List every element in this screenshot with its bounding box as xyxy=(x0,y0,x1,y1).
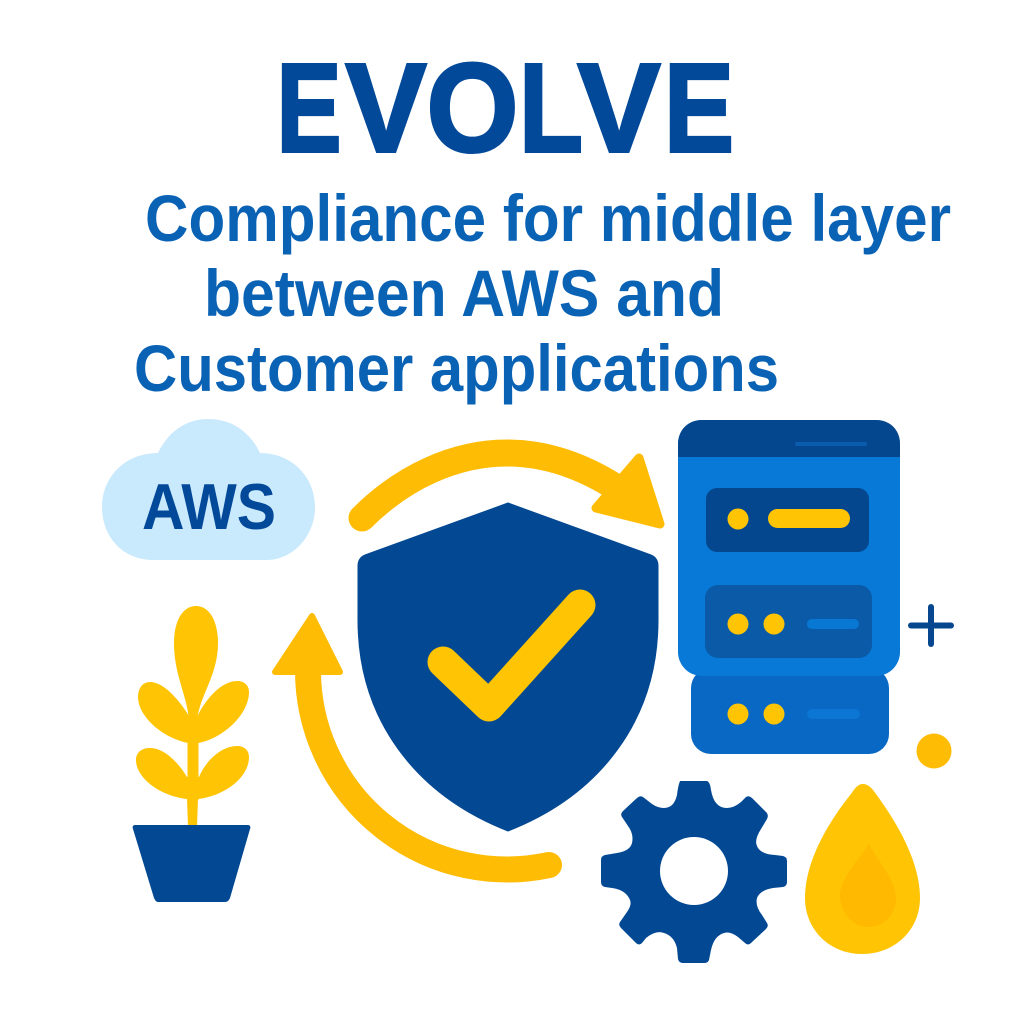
icon: plant xyxy=(133,606,250,902)
arrow: bottom curved arrow xyxy=(275,616,549,869)
plant pot xyxy=(133,825,250,902)
subtitle: between AWS and xyxy=(204,256,724,330)
subtitle: Compliance for middle layer xyxy=(145,181,951,255)
icon: flame drop xyxy=(805,784,920,954)
title: V xyxy=(346,38,426,178)
title: L xyxy=(519,38,583,178)
title: O xyxy=(426,38,518,178)
arrow: top curved arrow xyxy=(362,453,660,524)
icon: server stack xyxy=(678,420,900,754)
icon: AWS cloud: AWS xyxy=(142,470,276,543)
title xyxy=(276,38,734,178)
icon: gear xyxy=(601,781,787,963)
title: V xyxy=(578,38,660,178)
icon: AWS cloud xyxy=(102,419,315,560)
subtitle: Customer applications xyxy=(134,331,779,405)
server main body xyxy=(678,420,900,676)
icon: plus xyxy=(908,604,954,647)
subtitle xyxy=(134,181,951,405)
server lower unit xyxy=(691,668,889,754)
server row 1 xyxy=(706,488,869,552)
icon: yellow dot xyxy=(916,734,952,768)
title: E xyxy=(664,38,734,178)
server row 2 xyxy=(705,585,872,658)
title: E xyxy=(276,38,342,178)
icon: shield with check xyxy=(358,503,658,831)
